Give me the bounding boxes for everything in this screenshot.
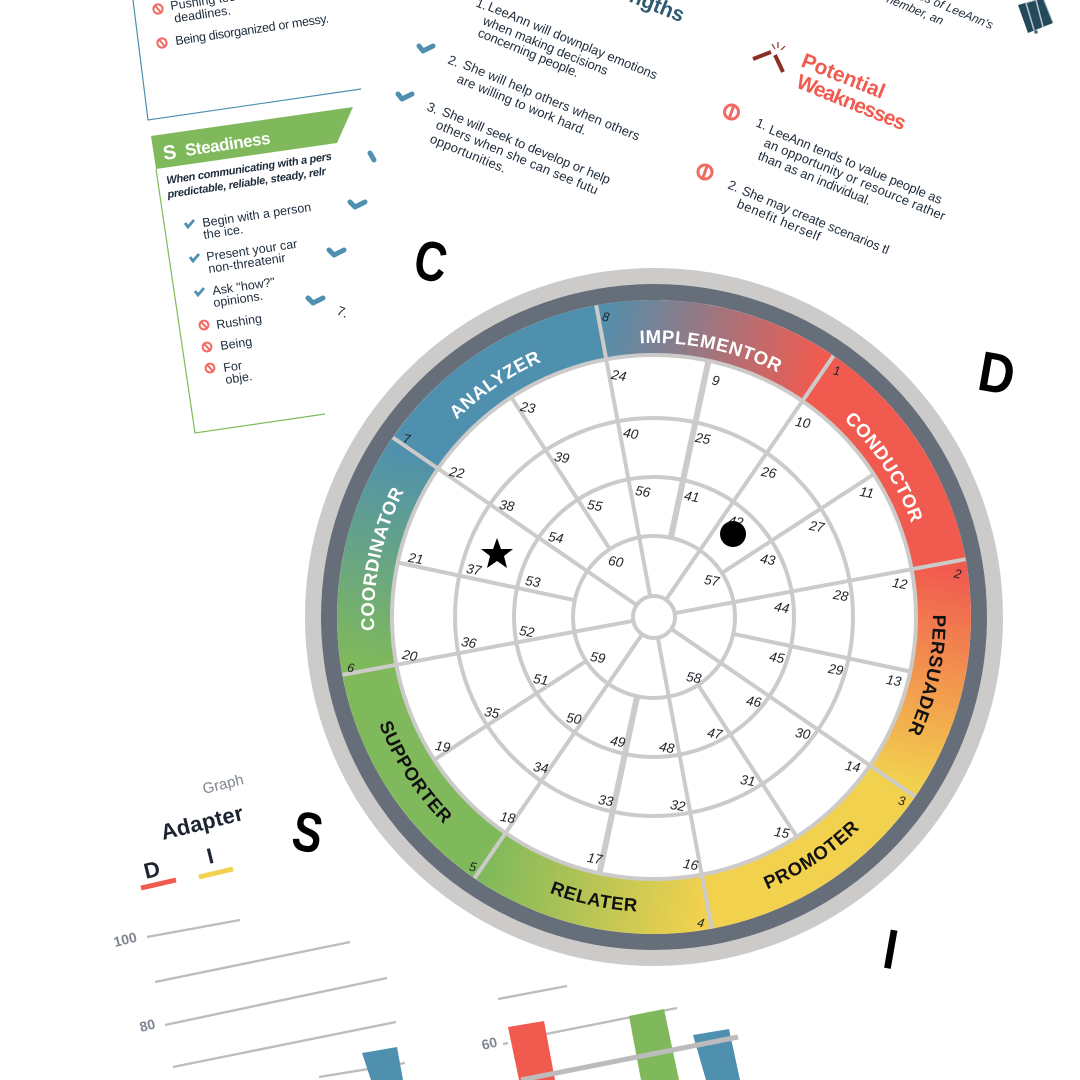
- letter: C: C: [410, 227, 452, 295]
- wheel cell numbers 9 to 60: 19: [434, 738, 452, 755]
- text: strengths list: others when she can see futu: [434, 117, 600, 197]
- text: weaknesses list: than as an individual.: [756, 148, 873, 208]
- wheel cell numbers 9 to 60: 16: [682, 856, 700, 873]
- wheel cell numbers 9 to 60: 47: [706, 725, 724, 742]
- segment labels: RELATER: [550, 881, 636, 912]
- text: strengths list: 2.: [446, 52, 462, 70]
- axis labels: 100: [112, 929, 139, 950]
- wheel cell numbers 9 to 60: 13: [885, 672, 903, 689]
- heading: steadiness: Steadiness: [184, 129, 272, 160]
- wheel cell numbers 9 to 60: 42: [727, 513, 745, 530]
- wheel cell numbers 9 to 60: 59: [589, 649, 607, 666]
- chart title: adapted: Adapter: [158, 800, 246, 845]
- icon: S badge: S: [162, 141, 178, 165]
- axis labels: 80: [138, 1016, 157, 1035]
- segment: relater: [474, 833, 712, 934]
- text: pushing too much: [169, 0, 252, 26]
- panel: steadiness communication: [151, 107, 353, 433]
- segment labels: [361, 330, 946, 912]
- bar: red: [508, 1021, 555, 1080]
- wheel cell numbers 9 to 60: 26: [759, 464, 778, 481]
- wheel cell numbers 9 to 60: 38: [498, 497, 516, 514]
- panel border: blue outline: [133, 0, 361, 120]
- wheel cell numbers 9 to 60: 35: [483, 704, 501, 721]
- wheel cell numbers 9 to 60: 11: [859, 484, 875, 501]
- legend: D: [141, 856, 176, 888]
- heading: potential weaknesses: Weaknesses: [793, 70, 909, 135]
- bar: blue right: [693, 1029, 740, 1080]
- wheel cell numbers 9 to 60: 43: [759, 551, 777, 568]
- text: number seven: 7.: [335, 303, 351, 321]
- wheel cell numbers 9 to 60: 33: [597, 792, 615, 809]
- wheel cell numbers 9 to 60: 49: [609, 733, 627, 750]
- text: steadiness list: Present your car: [205, 237, 298, 264]
- wheel cell numbers 9 to 60: 41: [683, 488, 700, 505]
- wheel cell numbers 9 to 60: 25: [693, 430, 712, 447]
- text: steadiness list: Ask "how?": [211, 275, 276, 298]
- icons: green panel checks: [185, 220, 204, 295]
- text: steadiness list: For: [222, 358, 243, 375]
- wheel cell numbers 9 to 60: 45: [768, 649, 786, 666]
- wheel cell numbers 9 to 60: 34: [532, 759, 549, 776]
- text: strengths list: She will help others when others: [461, 57, 643, 144]
- text: strengths list: are willing to work hard.: [455, 71, 589, 138]
- text: steadiness list: [201, 200, 312, 387]
- bar: green: [629, 1009, 679, 1080]
- wheel cell numbers 9 to 60: 60: [607, 553, 625, 570]
- chart: adapted graph fragment: [112, 771, 740, 1080]
- segment numbers 1 to 8: 7: [402, 432, 412, 447]
- segment: implementor: [596, 300, 834, 401]
- segment labels: ANALYZER: [452, 352, 542, 420]
- wheel cell numbers 9 to 60: 58: [685, 669, 703, 686]
- wheel cell numbers 9 to 60: 14: [844, 758, 861, 775]
- legend: I: [199, 843, 233, 877]
- text: strengths list: 3.: [425, 99, 441, 117]
- segment labels: CONDUCTOR: [846, 413, 922, 523]
- chart caption: graph: Graph: [201, 771, 245, 798]
- text: steadiness intro: When communicating with a pers: [166, 151, 333, 187]
- wheel cell numbers 9 to 60: 44: [773, 599, 790, 616]
- segment: promoter: [702, 765, 915, 929]
- text: strengths list: opportunities.: [428, 131, 508, 176]
- text: steadiness list: Rushing: [215, 311, 263, 332]
- text: steadiness list: Being: [219, 334, 253, 353]
- icon: stop sign: [153, 4, 163, 14]
- icons: green panel stop signs: [200, 321, 214, 372]
- wheel cell numbers 9 to 60: 17: [586, 850, 604, 867]
- text: weaknesses list: benefit herself: [735, 196, 823, 244]
- wheel cell numbers 9 to 60: 9: [711, 373, 721, 389]
- segment: analyzer: [393, 305, 606, 469]
- wheel cell numbers 9 to 60: 29: [826, 661, 845, 678]
- segment numbers 1 to 8: 6: [346, 661, 355, 676]
- wheel: white center: [392, 355, 916, 879]
- text: being disorganized: Being disorganized or messy.: [174, 11, 330, 48]
- segment numbers 1 to 8: [346, 310, 962, 931]
- text: weaknesses list: [726, 115, 948, 257]
- wheel cell numbers 9 to 60: 36: [460, 634, 478, 651]
- wheel cell numbers 9 to 60: 24: [609, 367, 627, 384]
- panel: strengths: [308, 0, 688, 321]
- text: strengths list: concerning people.: [476, 25, 581, 80]
- letter: S: S: [288, 798, 328, 866]
- wheel cell numbers 9 to 60: 48: [658, 739, 676, 756]
- wheel cell numbers 9 to 60: 54: [547, 529, 564, 546]
- wheel: DISC circle: [305, 268, 1003, 966]
- legend: D: D: [141, 856, 163, 884]
- wheel cell numbers 9 to 60: 40: [622, 425, 640, 442]
- segment labels: PROMOTER: [763, 822, 860, 889]
- icon: broken pencil: [753, 42, 785, 72]
- segment numbers 1 to 8: 3: [897, 794, 906, 809]
- text: weaknesses list: an opportunity or resource rather: [762, 135, 948, 224]
- wheel cell numbers 9 to 60: 55: [586, 497, 604, 514]
- wheel cell numbers 9 to 60: 52: [518, 623, 536, 640]
- wheel cell numbers 9 to 60: 15: [773, 824, 791, 841]
- text: strengths list: when making decisions: [480, 13, 611, 78]
- icons: strength checks: [308, 46, 433, 303]
- wheel cell numbers 9 to 60: 57: [703, 572, 721, 589]
- segment numbers 1 to 8: 4: [696, 916, 705, 931]
- wheel cell numbers 9 to 60: 53: [524, 573, 542, 590]
- axis labels: 60: [480, 1034, 499, 1053]
- segment numbers 1 to 8: 1: [832, 364, 841, 379]
- letter: I: I: [879, 917, 903, 981]
- text: steadiness list: opinions.: [212, 289, 264, 310]
- icon: logo: [1018, 0, 1053, 34]
- text: weaknesses list: 1.: [754, 115, 770, 133]
- wheel cell numbers 9 to 60: 51: [532, 671, 549, 688]
- heading: potential weaknesses: Potential: [798, 49, 888, 104]
- icon: stop sign: [157, 38, 167, 48]
- text: steadiness list: non-threatenir: [207, 251, 286, 276]
- wheel cell numbers 9 to 60: 56: [634, 483, 652, 500]
- wheel cell numbers 9 to 60: 28: [831, 587, 850, 604]
- text: weaknesses list: She may create scenarios tl: [740, 183, 892, 257]
- wheel cell numbers 9 to 60: 23: [518, 399, 537, 416]
- segment labels: IMPLEMENTOR: [640, 330, 782, 372]
- segment labels: SUPPORTER: [380, 721, 451, 824]
- text: steadiness list: the ice.: [202, 222, 244, 242]
- chart gridlines: [147, 920, 677, 1077]
- wheel cell numbers 9 to 60: 22: [447, 464, 466, 481]
- wheel cell numbers 9 to 60: 18: [499, 809, 517, 826]
- icons: weakness stop signs: [698, 105, 738, 179]
- wheel cell numbers 9 to 60: 46: [745, 693, 763, 710]
- wheel cell numbers 9 to 60: 32: [669, 797, 687, 814]
- text: pushing too much: deadlines.: [173, 3, 232, 26]
- panel: potential weaknesses: [698, 42, 948, 257]
- wheel cell numbers 9 to 60: 30: [794, 725, 812, 742]
- segment numbers 1 to 8: 5: [468, 860, 477, 875]
- wheel cell numbers 9 to 60: 21: [406, 550, 424, 567]
- text: strengths list: She will seek to develop or help: [440, 104, 613, 187]
- wheel cell numbers 9 to 60: 31: [739, 772, 756, 789]
- axis labels: [112, 929, 499, 1053]
- wheel cell numbers 9 to 60: 27: [807, 518, 826, 535]
- panel: dominance communication fragment: [133, 0, 361, 120]
- segment: coordinator: [337, 438, 438, 675]
- text: strengths list: LeeAnn will downplay emotions: [486, 0, 660, 83]
- wheel cell numbers 9 to 60: 39: [553, 449, 571, 466]
- bar: blue left: [362, 1047, 403, 1080]
- marker: black dot: [720, 521, 746, 547]
- heading band: steadiness: [151, 107, 353, 169]
- text: weaknesses list: LeeAnn tends to value people as: [767, 122, 945, 207]
- legend: I: I: [204, 843, 216, 869]
- marker: black star: [481, 538, 513, 568]
- wheel cell numbers 9 to 60: [400, 367, 909, 873]
- chart midline: [521, 1037, 738, 1080]
- wheel cell numbers 9 to 60: 10: [794, 414, 812, 431]
- wheel cell numbers 9 to 60: 37: [465, 561, 483, 578]
- segment labels: COORDINATOR: [361, 488, 404, 630]
- letter: D: D: [974, 340, 1020, 408]
- wheel grid: rings and spokes: [342, 305, 966, 929]
- text: strengths list: [425, 0, 660, 197]
- segment numbers 1 to 8: 2: [952, 566, 962, 582]
- segment labels: PERSUADER: [908, 616, 946, 736]
- text: steadiness intro: predictable, reliable, steady, relr: [166, 166, 327, 201]
- wheel cell numbers 9 to 60: 12: [891, 575, 909, 592]
- text: weaknesses list: 2.: [726, 177, 742, 195]
- segment numbers 1 to 8: 8: [601, 310, 610, 325]
- segment: conductor: [802, 356, 966, 569]
- segment: supporter: [342, 665, 506, 878]
- text: steadiness list: Begin with a person: [201, 200, 312, 230]
- wheel cell numbers 9 to 60: 20: [400, 647, 419, 664]
- wheel outer rings: [313, 276, 995, 958]
- segment: persuader: [870, 559, 971, 796]
- wheel cell numbers 9 to 60: 50: [565, 710, 583, 727]
- text: steadiness list: obje.: [224, 369, 253, 387]
- panel border: green outline: [156, 169, 325, 433]
